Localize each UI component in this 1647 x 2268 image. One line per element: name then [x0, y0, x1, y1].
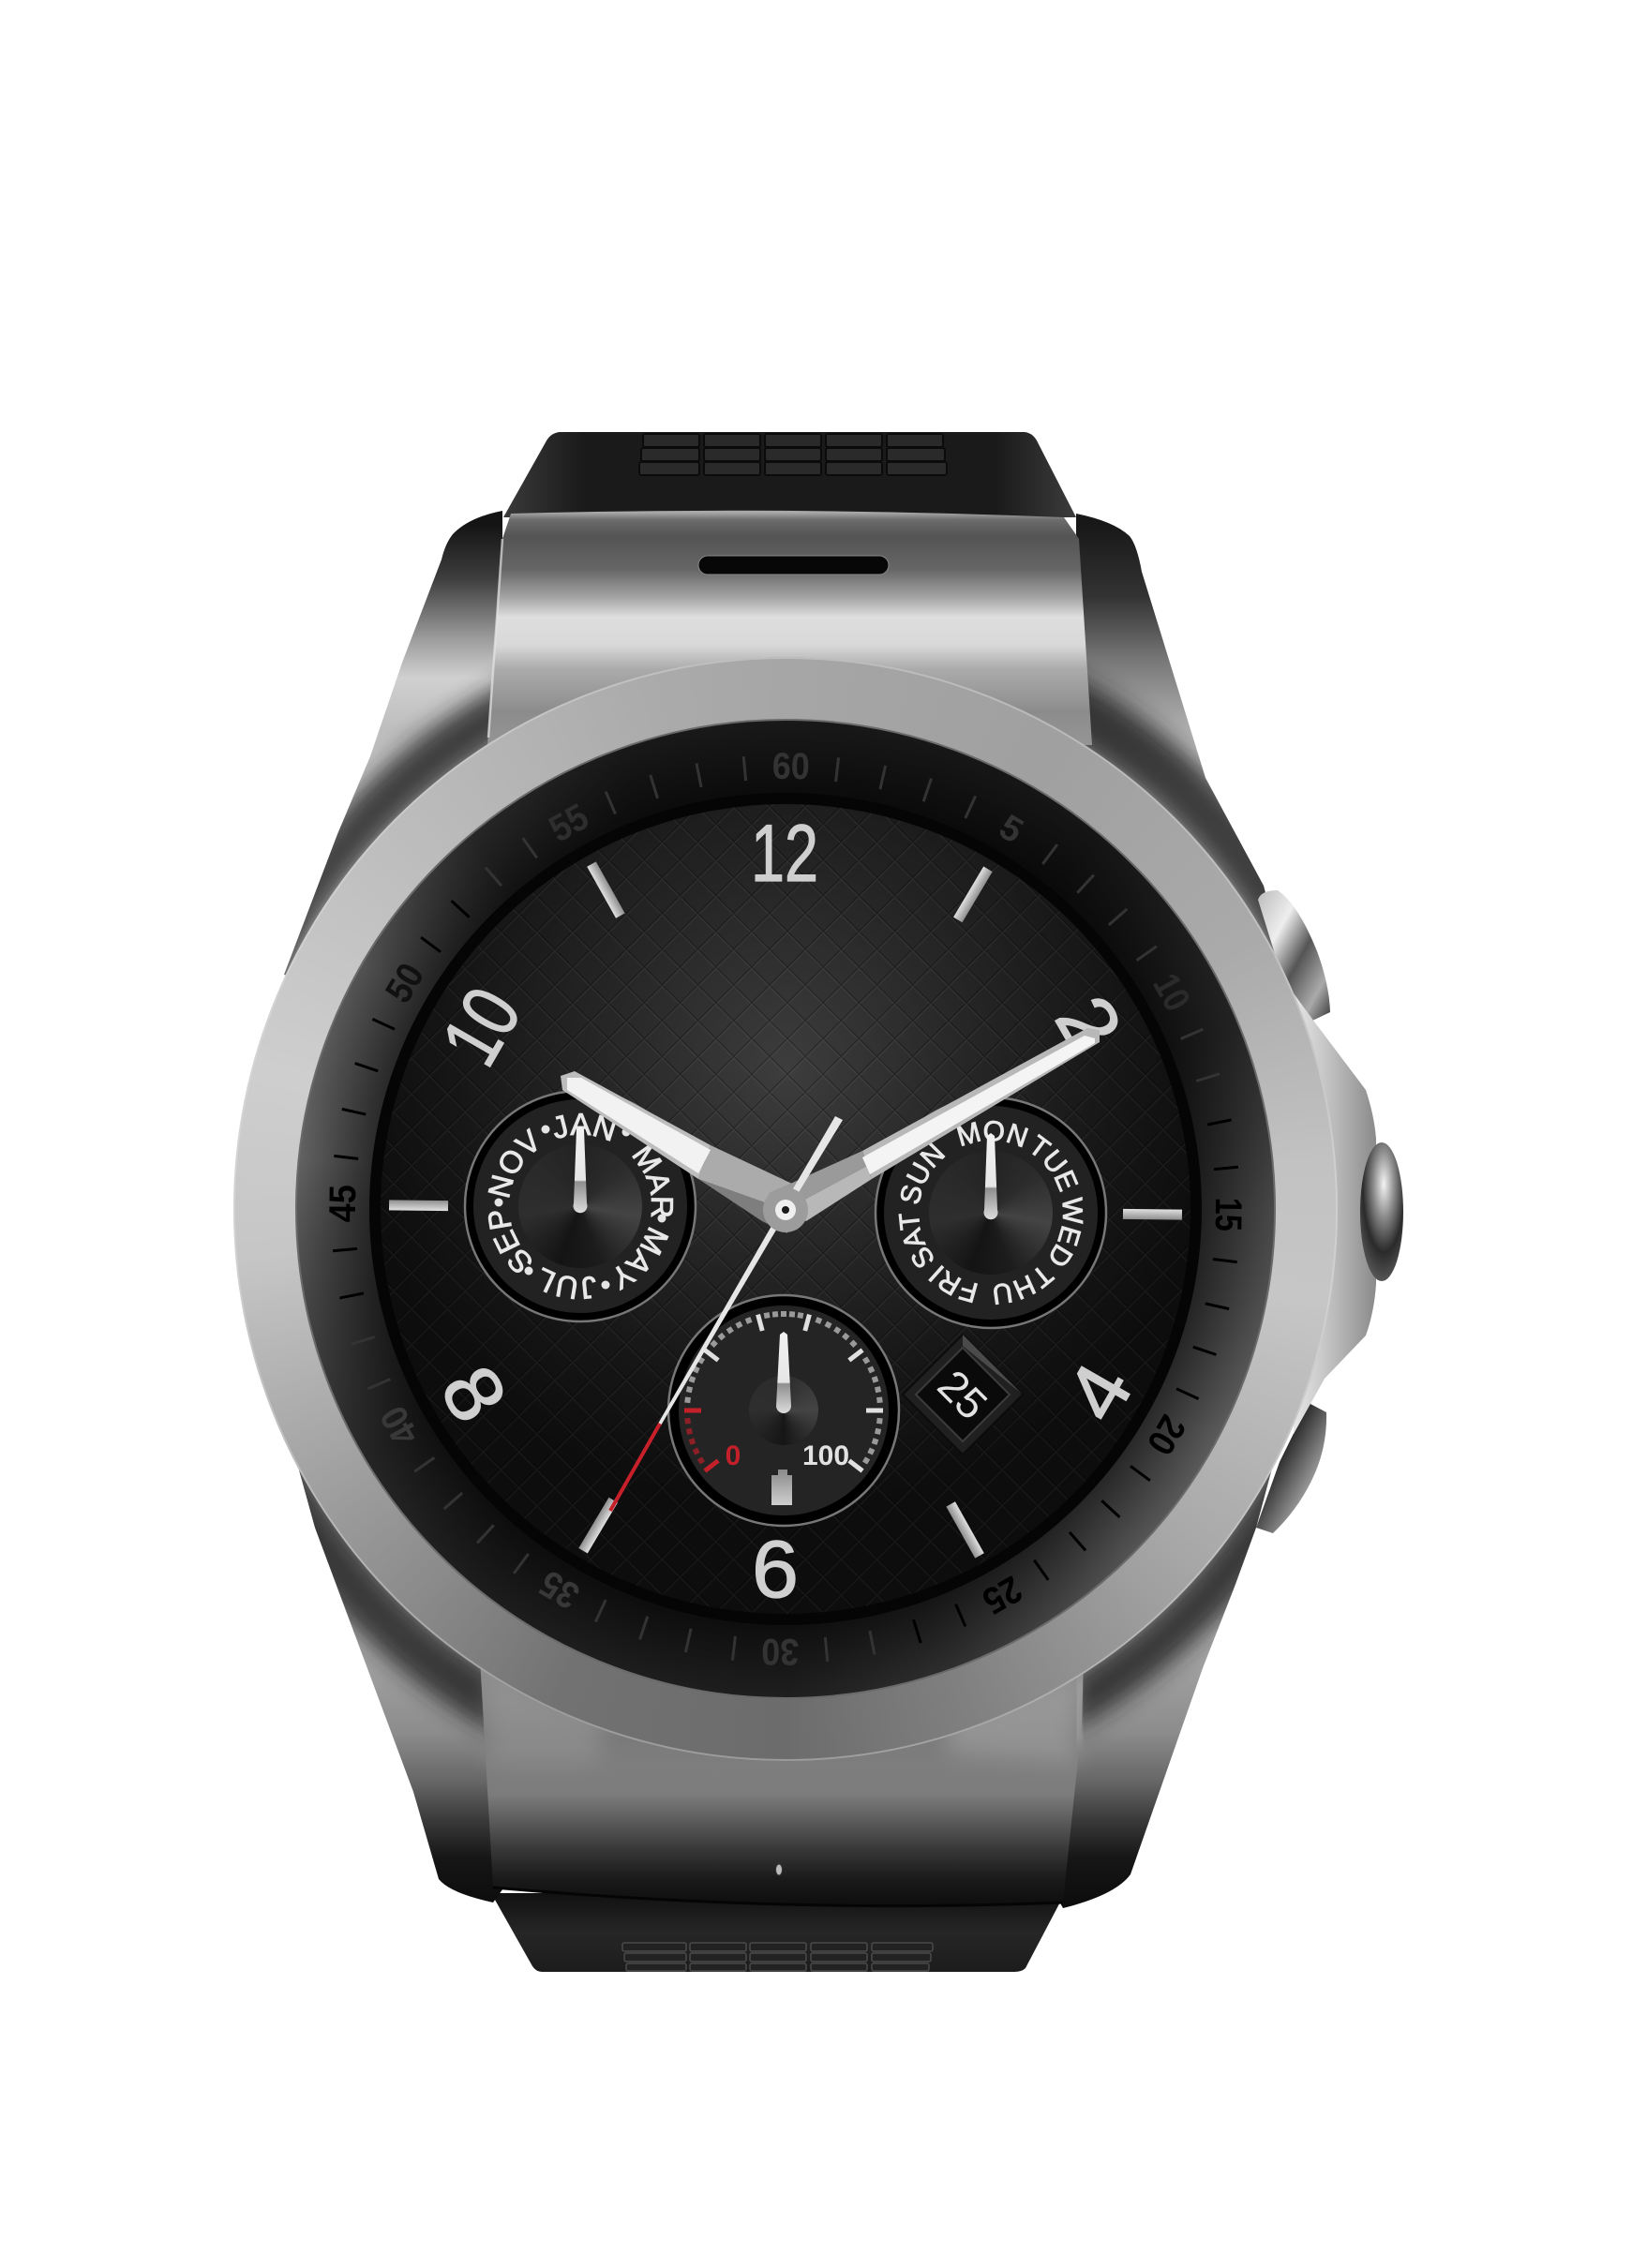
ring ticks and numerals: 35 — [533, 1562, 586, 1617]
crown — [1360, 1142, 1403, 1281]
weekday labels: SAT — [898, 1214, 934, 1268]
month labels: SEP — [487, 1211, 532, 1273]
button: lower — [1256, 1403, 1326, 1533]
ring ticks and numerals: 20 — [1139, 1409, 1193, 1461]
month separators — [495, 1125, 666, 1290]
month labels: NOV — [487, 1127, 536, 1198]
crown housing — [1294, 993, 1376, 1434]
month labels: JAN — [553, 1113, 615, 1141]
month labels: MAY — [615, 1227, 669, 1291]
hour numerals: 8 — [423, 1351, 524, 1437]
side buttons and crown housing — [1256, 890, 1403, 1533]
ring ticks and numerals — [317, 740, 1254, 1678]
month labels: MAR — [632, 1145, 673, 1217]
centre link: upper — [487, 511, 1092, 745]
gauge scale — [684, 1311, 883, 1473]
lug: lower left — [298, 1470, 502, 1902]
hour numerals: 10 — [425, 974, 538, 1080]
month labels — [487, 1113, 673, 1299]
ring ticks and numerals: 10 — [1145, 967, 1198, 1018]
subdial: months — [463, 1091, 697, 1323]
needle — [574, 1127, 587, 1213]
sensor — [776, 1864, 782, 1875]
minute hand — [769, 1028, 1100, 1221]
date window — [903, 1335, 1023, 1455]
illustration: smartwatch front view — [233, 432, 1403, 1972]
lug: lower right — [1061, 1471, 1271, 1908]
weekday labels: WED — [1050, 1196, 1084, 1265]
icon: battery — [771, 1470, 792, 1505]
hour numerals: 12 — [751, 809, 818, 899]
ring ticks and numerals: 50 — [378, 957, 432, 1009]
hour index bars — [385, 859, 1186, 1560]
ring ticks and numerals: 60 — [771, 746, 810, 787]
centre pin — [763, 1187, 808, 1232]
lug: upper right — [1076, 514, 1275, 953]
hour numerals: 4 — [1048, 1349, 1150, 1436]
hour numerals: 6 — [752, 1525, 799, 1615]
weekday labels: MON — [956, 1121, 1029, 1147]
bezel — [233, 657, 1338, 1761]
weekday labels: FRI — [928, 1265, 978, 1303]
button: upper — [1258, 890, 1330, 1022]
hour numerals — [423, 809, 1150, 1615]
speaker slot — [698, 556, 889, 574]
hour numerals: 2 — [1038, 981, 1139, 1067]
date number: 25 — [929, 1361, 996, 1428]
dial — [369, 793, 1202, 1625]
weekday labels: SUN — [900, 1143, 945, 1203]
ring ticks and numerals: 40 — [372, 1399, 427, 1452]
month labels: JUL — [542, 1267, 596, 1299]
ring ticks and numerals: 15 — [1207, 1197, 1249, 1231]
tachymeter ring — [296, 720, 1275, 1698]
ring ticks and numerals: 30 — [761, 1631, 800, 1672]
ring ticks and numerals: 5 — [993, 808, 1029, 851]
weekday labels — [898, 1121, 1084, 1305]
hands — [561, 1028, 1100, 1511]
lug: upper left — [284, 511, 502, 975]
subdial: battery gauge — [668, 1295, 899, 1526]
centre link: lower — [480, 1659, 1084, 1906]
gauge label: 0: 0 — [726, 1440, 741, 1471]
hour hand — [561, 1071, 792, 1233]
strap: lower band — [491, 1893, 1065, 1972]
ring ticks and numerals: 25 — [976, 1568, 1028, 1622]
strap texture: lower grid — [622, 1943, 933, 1971]
strap texture: upper grid — [639, 434, 947, 475]
needle — [776, 1332, 791, 1413]
ring ticks and numerals: 55 — [543, 796, 595, 850]
ring ticks and numerals: 45 — [322, 1185, 364, 1223]
weekday labels: TUE — [1032, 1134, 1078, 1192]
subdial: weekdays — [874, 1097, 1108, 1329]
needle — [984, 1133, 997, 1219]
weekday labels: THU — [994, 1267, 1056, 1305]
gauge label: 100: 100 — [802, 1440, 849, 1471]
second hand — [610, 1116, 843, 1511]
strap: upper band — [503, 432, 1076, 517]
